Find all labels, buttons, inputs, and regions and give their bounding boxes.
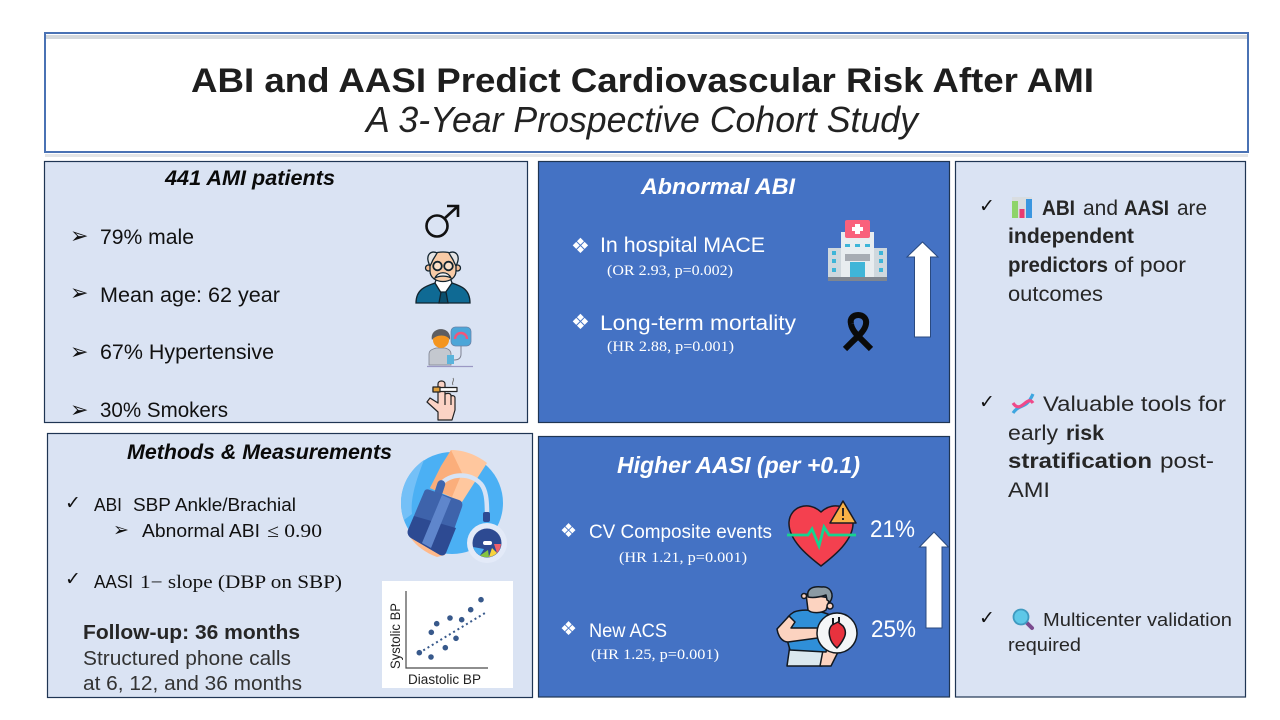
heading: methods: Methods & Measurements — [127, 441, 392, 464]
item: hypertensive: 67% Hypertensive — [100, 341, 274, 364]
conclusion: multicenter validation: required — [1008, 635, 1081, 655]
icon: male symbol — [426, 206, 458, 236]
heading: abnormal ABI: Abnormal ABI — [640, 174, 796, 199]
item: in hospital MACE: ❖ — [571, 234, 590, 258]
icon: magnifier — [1014, 610, 1032, 628]
value: 25%: 25% — [871, 616, 916, 643]
follow-up text: Follow-up: 36 months — [83, 622, 300, 644]
item: in hospital MACE — [571, 234, 765, 279]
panel: patients — [44, 162, 528, 423]
item: long-term mortality: (HR 2.88, p=0.001) — [607, 339, 734, 355]
conclusion: multicenter validation — [979, 607, 1232, 655]
conclusion: risk stratification: stratification — [1008, 449, 1152, 473]
panel: methods and measurements — [48, 434, 532, 698]
conclusion: independent predictors: and — [1083, 196, 1118, 220]
arrow: up — [920, 532, 948, 628]
item: abnormal ABI threshold — [113, 519, 322, 542]
conclusion: risk stratification — [979, 391, 1226, 502]
icon: hospital — [828, 220, 887, 281]
conclusion: risk stratification: post- — [1160, 449, 1214, 473]
icon: heart with warning — [787, 501, 856, 566]
follow-up text: Structured phone calls — [83, 648, 291, 670]
item: hypertensive: ➢ — [70, 340, 88, 365]
conclusion: risk stratification: AMI — [1008, 478, 1050, 502]
icon: hand with cigarette — [427, 378, 457, 420]
item: CV composite events: (HR 1.21, p=0.001) — [619, 550, 747, 566]
chart: systolic vs diastolic scatter: Systolic BP — [388, 603, 403, 669]
item: AASI definition: ✓ — [65, 568, 81, 590]
item: ABI definition: ✓ — [65, 492, 81, 514]
item: abnormal ABI threshold: ➢ — [113, 519, 129, 541]
item: new ACS: (HR 1.25, p=0.001) — [591, 647, 719, 663]
chart: systolic vs diastolic scatter: Diastolic BP — [408, 672, 481, 687]
icon: old man — [416, 252, 470, 303]
item: AASI definition — [65, 568, 342, 593]
icon: blood pressure cuff — [401, 450, 507, 563]
follow-up text: at 6, 12, and 36 months — [83, 673, 302, 695]
icon: man with chest pain — [777, 587, 857, 666]
item: smokers: ➢ — [70, 398, 88, 423]
item: AASI definition: 1− slope (DBP on SBP) — [140, 573, 342, 593]
item: ABI definition — [65, 492, 296, 515]
icon: bar chart — [1012, 197, 1032, 218]
conclusion: independent predictors: ABI — [1042, 196, 1075, 220]
item: male: 79% male — [100, 226, 194, 249]
item: new ACS: ❖ — [560, 618, 577, 640]
title: ABI and AASI Predict Cardiovascular Risk After AMI — [191, 62, 1094, 100]
item: CV composite events — [560, 520, 772, 566]
chart: systolic vs diastolic scatter — [382, 581, 513, 688]
item: long-term mortality — [571, 310, 797, 355]
conclusion: independent predictors — [979, 195, 1207, 306]
item: age: ➢ — [70, 281, 88, 306]
conclusion: risk stratification: risk — [1066, 421, 1104, 445]
follow-up text — [83, 622, 302, 695]
item: in hospital MACE: (OR 2.93, p=0.002) — [607, 263, 733, 279]
item: CV composite events: CV Composite events — [589, 522, 772, 543]
icon: DNA — [1013, 394, 1033, 413]
conclusion: risk stratification: ✓ — [979, 391, 995, 413]
heading: 441 AMI patients: 441 AMI patients — [164, 167, 335, 190]
panel: abnormal ABI — [538, 162, 950, 422]
item: new ACS: New ACS — [589, 621, 667, 642]
arrow: up — [907, 242, 938, 337]
title banner — [45, 33, 1248, 157]
conclusion: independent predictors: of poor — [1114, 253, 1186, 277]
item: CV composite events: ❖ — [560, 520, 577, 542]
item: long-term mortality: Long-term mortality — [600, 312, 797, 335]
item: abnormal ABI threshold: Abnormal ABI — [142, 520, 260, 541]
conclusion: multicenter validation: Multicenter validation — [1043, 610, 1232, 630]
item: ABI definition: SBP Ankle/Brachial — [133, 494, 296, 515]
heading: higher AASI: Higher AASI (per +0.1) — [617, 452, 860, 478]
conclusion: independent predictors: AASI — [1124, 196, 1169, 220]
item: abnormal ABI threshold: ≤ 0.90 — [267, 522, 322, 542]
conclusion: independent predictors: predictors — [1008, 253, 1108, 277]
conclusion: independent predictors: are — [1177, 196, 1207, 220]
item: smokers: 30% Smokers — [100, 399, 228, 422]
item: long-term mortality: ❖ — [571, 310, 590, 334]
conclusion: independent predictors: outcomes — [1008, 282, 1103, 306]
icon: blood pressure check — [427, 327, 473, 366]
item: age: Mean age: 62 year — [100, 284, 280, 307]
subtitle: A 3-Year Prospective Cohort Study — [364, 99, 920, 140]
conclusion: risk stratification: Valuable tools for — [1043, 392, 1226, 416]
item: male: ➢ — [70, 224, 88, 249]
conclusion: multicenter validation: ✓ — [979, 607, 995, 629]
item: new ACS — [560, 618, 719, 663]
item: ABI definition: ABI — [94, 494, 122, 515]
item: male — [70, 224, 194, 249]
panel: conclusions — [956, 162, 1246, 697]
conclusion: independent predictors: independent — [1008, 224, 1134, 248]
item: AASI definition: AASI — [94, 571, 133, 592]
panel: higher AASI — [538, 436, 950, 697]
value: 21%: 21% — [870, 516, 915, 543]
conclusion: independent predictors: ✓ — [979, 195, 995, 217]
conclusion: risk stratification: early — [1008, 421, 1058, 445]
item: in hospital MACE: In hospital MACE — [600, 234, 765, 257]
icon: black ribbon — [845, 315, 871, 349]
